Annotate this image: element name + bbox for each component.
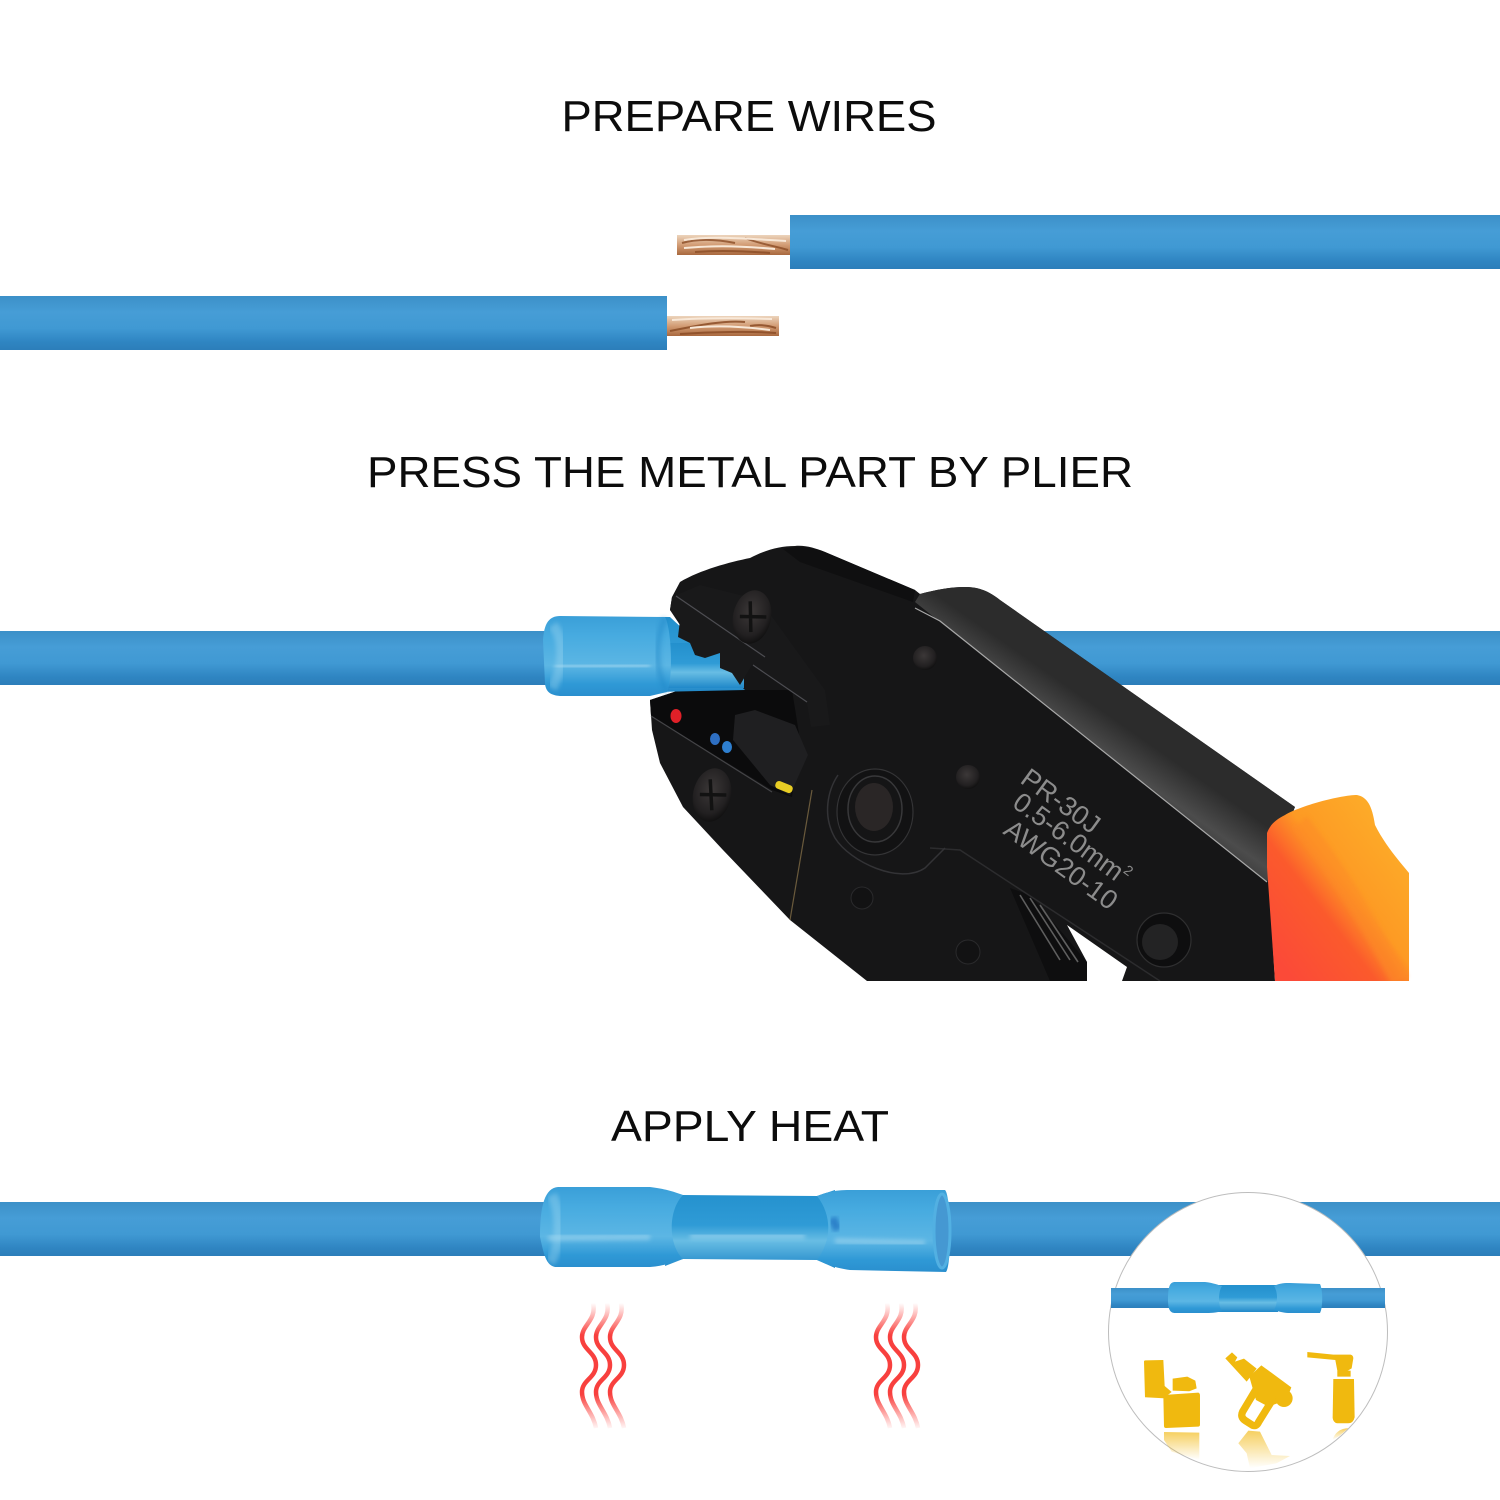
icons, reflected: [1144, 1352, 1355, 1468]
title: press the metal part: PRESS THE METAL PART BY PLIER: [367, 448, 1133, 497]
lower left wire: [0, 296, 667, 350]
dot: red: [670, 709, 682, 723]
connector being crimped: [543, 616, 745, 696]
body highlight edge: [915, 608, 1267, 882]
mini wire: [1111, 1288, 1385, 1308]
inset circle: heat tools: [1108, 1192, 1388, 1472]
icon reflections: [1164, 1428, 1348, 1468]
sleeve highlights: [548, 1236, 925, 1243]
step 3 wire right: [935, 1202, 1500, 1256]
heat waves right: [876, 1303, 918, 1428]
plier engraved text: PR-30J: [1015, 763, 1106, 840]
plier engraved text: 2: [1121, 862, 1137, 879]
right sleeve mouth: [934, 1194, 950, 1268]
plier engraved text: [1002, 768, 1133, 908]
lower arm seam: [790, 790, 812, 920]
heat shrink butt connector: [540, 1187, 950, 1272]
handle grip: [915, 587, 1295, 882]
crimping plier: [543, 546, 1409, 981]
rivet: [851, 887, 873, 909]
jaw edge line: [676, 596, 807, 702]
plier engraved text: AWG20-10: [998, 814, 1123, 916]
top slot: [817, 549, 915, 590]
icon: lighter: [1144, 1360, 1200, 1428]
rivet: [956, 765, 978, 786]
lower handle ridges: [1010, 888, 1087, 981]
left sleeve: [540, 1187, 683, 1267]
pivot bolt: [837, 769, 913, 855]
lower screw: [693, 768, 730, 816]
icon: heat gun: [1225, 1352, 1293, 1426]
mini connector: [1168, 1282, 1322, 1313]
rivet: [956, 940, 980, 964]
icon: blow torch: [1307, 1352, 1355, 1423]
upper jaw teeth: [670, 596, 792, 691]
upper right wire: [790, 215, 1500, 269]
rivet: [913, 646, 936, 668]
title: prepare wires: PREPARE WIRES: [562, 92, 936, 141]
right sleeve: [817, 1190, 950, 1272]
title: apply heat: APPLY HEAT: [611, 1102, 889, 1151]
neck: [665, 1190, 835, 1268]
step 2 wire left: [0, 631, 550, 685]
step 2 wire right: [1040, 631, 1500, 685]
lower jaw plate: [650, 690, 808, 797]
pivot arm outline: [828, 775, 945, 874]
lower stripped copper end: [667, 316, 779, 336]
heat waves left: [582, 1303, 624, 1428]
orange handle: [1267, 795, 1409, 981]
plier body: [650, 546, 1295, 981]
dot: yellow: [775, 781, 793, 793]
dot: blue right: [722, 741, 732, 753]
upper screw: [734, 590, 770, 644]
upper stripped copper end: [677, 235, 790, 255]
step 3 wire left: [0, 1202, 550, 1256]
dot: blue left: [710, 733, 720, 745]
large rivet: [1137, 913, 1191, 967]
step 1 wires: [0, 215, 1500, 350]
plier engraved text: 0.5-6.0mm: [1007, 787, 1130, 887]
lower edge line: [930, 848, 1160, 981]
